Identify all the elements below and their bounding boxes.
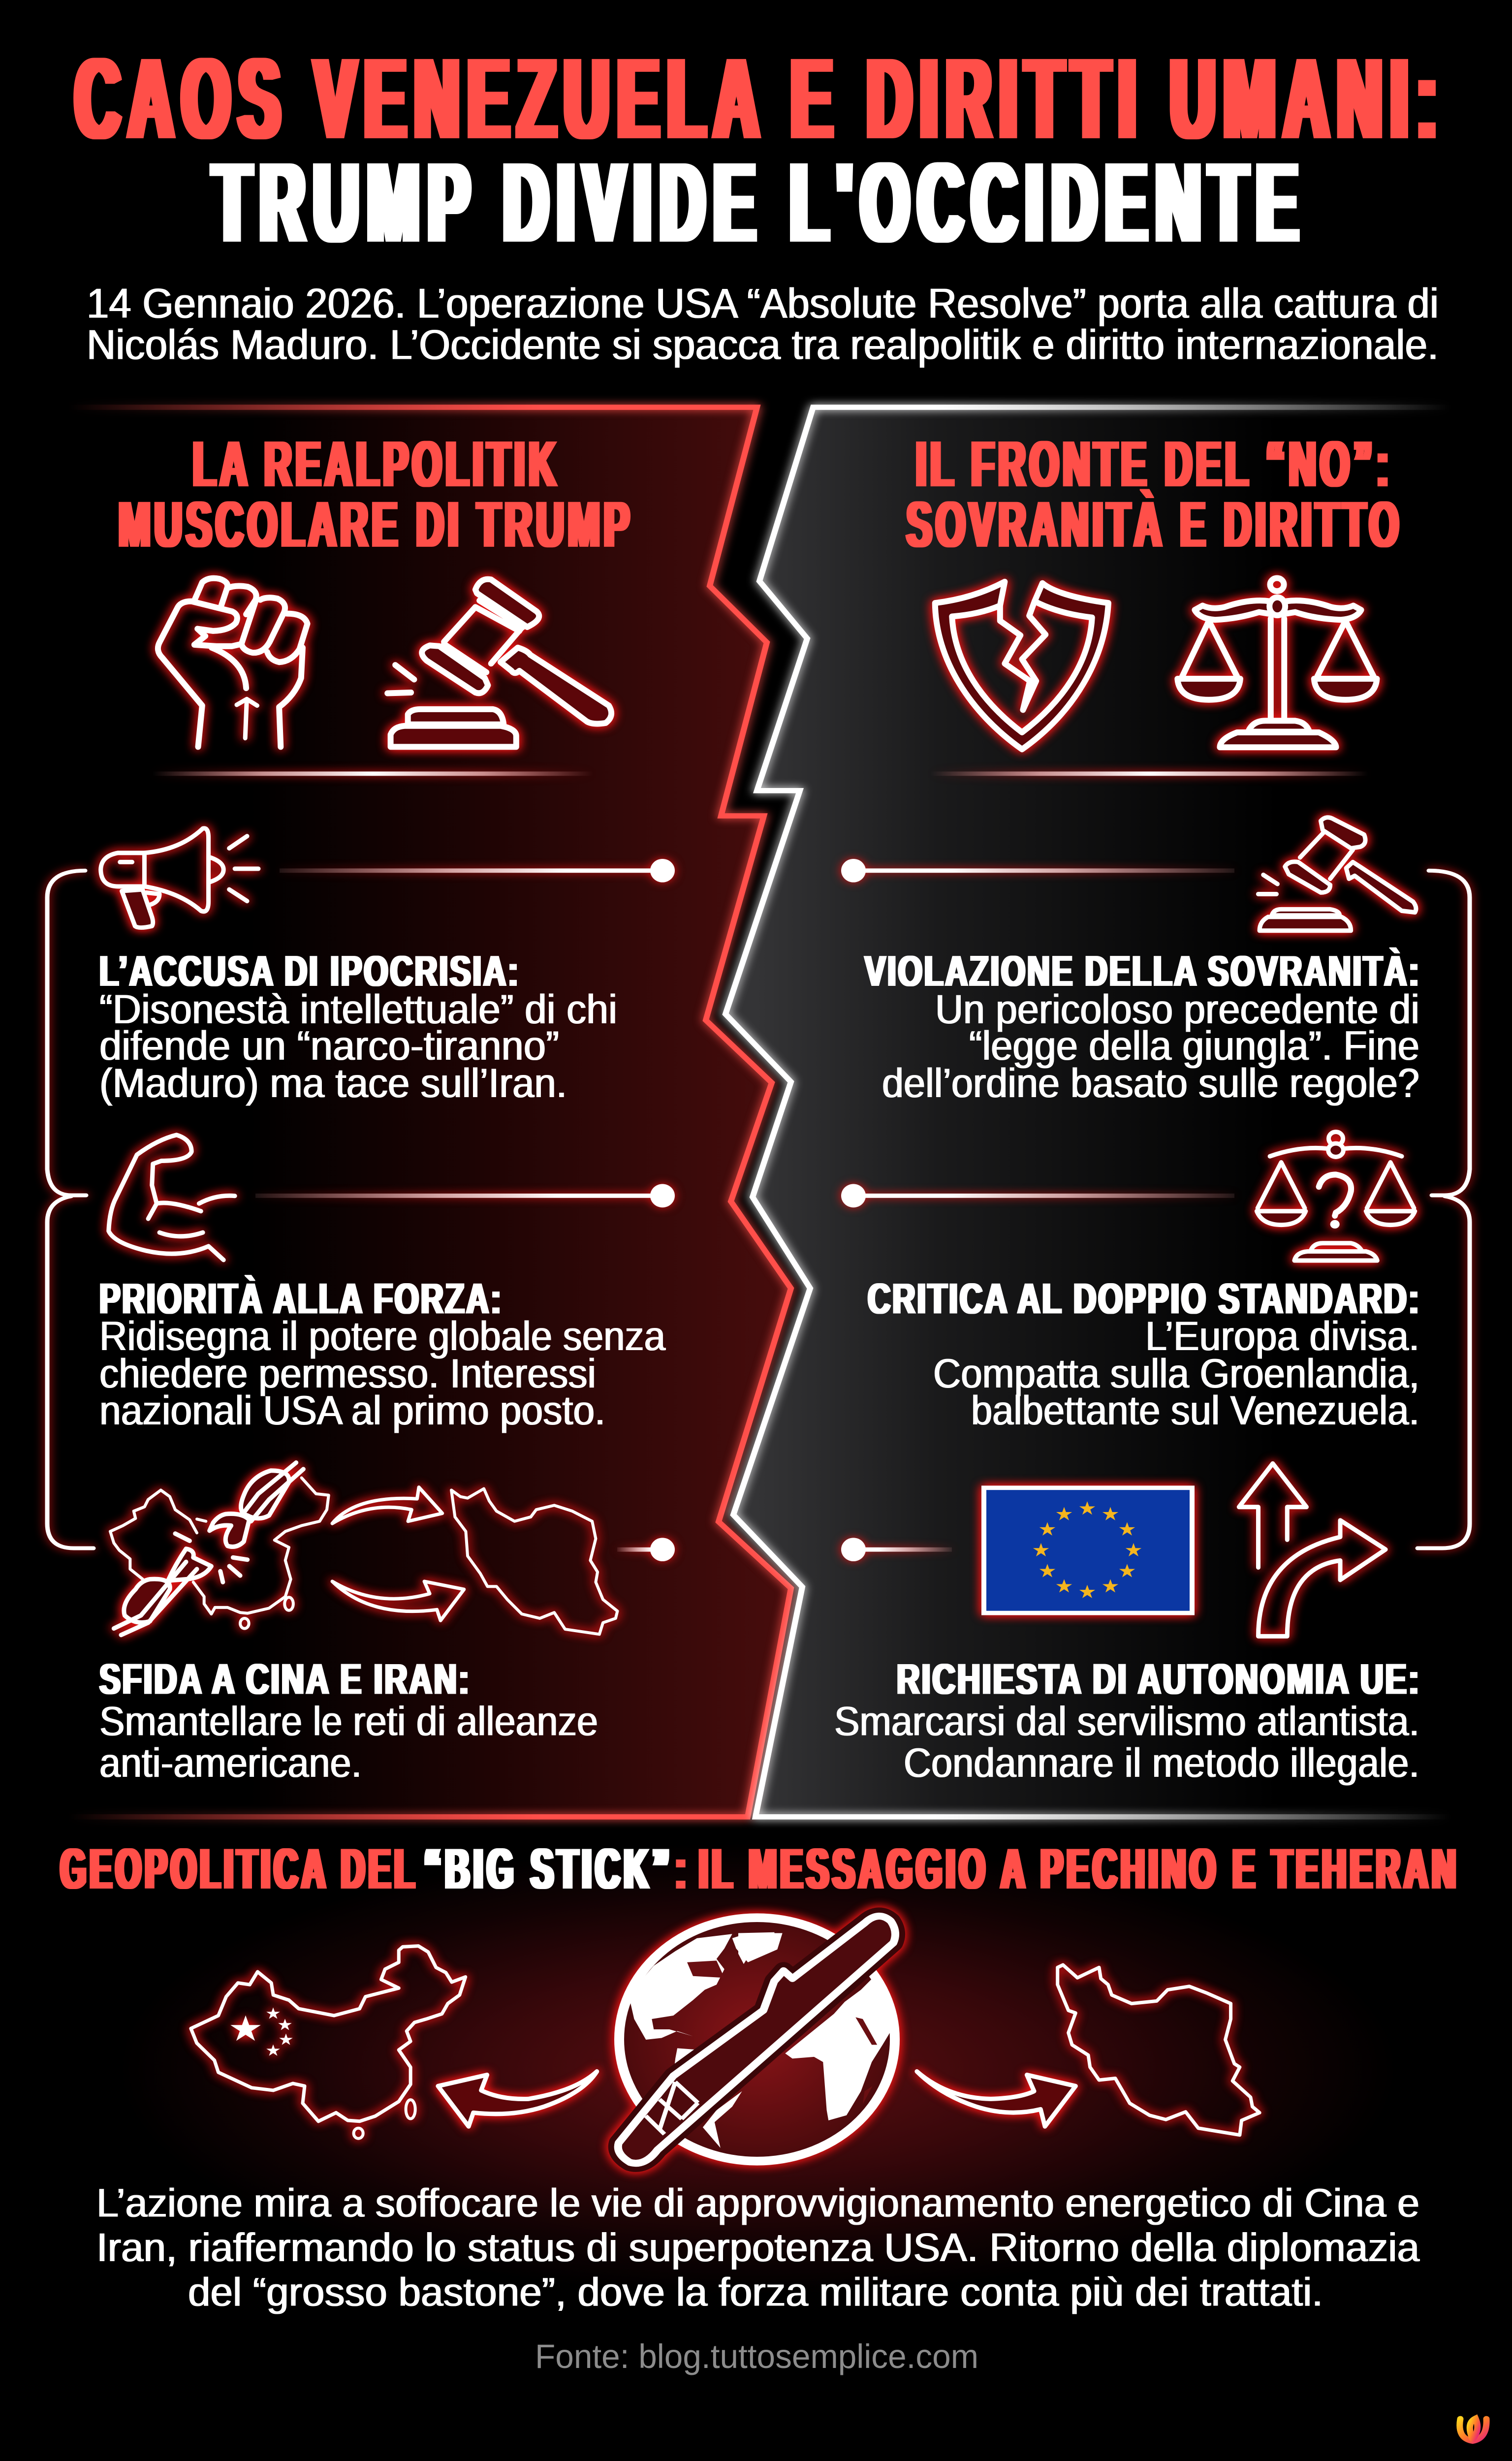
- icon: EU flag: [984, 1488, 1192, 1613]
- bottom paragraph: del “grosso bastone”, dove la forza militare conta più dei trattati.: [188, 2270, 1323, 2315]
- right panel heading: [907, 427, 1403, 561]
- arrow to china: [438, 2072, 597, 2126]
- text block: priorita alla forza: PRIORITÀ ALLA FORZA:: [99, 1274, 503, 1323]
- text block: sfida a cina e iran: Smantellare le reti di alleanze: [99, 1698, 598, 1744]
- icon: small gavel: [1258, 818, 1416, 931]
- text block: accusa di ipocrisia: [99, 947, 617, 1106]
- connector lines right: [841, 859, 1234, 1561]
- icon: broken shield: [935, 582, 1108, 749]
- text block: accusa di ipocrisia: L’ACCUSA DI IPOCRISIA:: [99, 947, 520, 995]
- text block: priorita alla forza: nazionali USA al primo posto.: [99, 1387, 605, 1433]
- text block: critica al doppio standard: L’Europa divisa.: [1145, 1313, 1419, 1359]
- globe fill: [619, 1918, 895, 2161]
- icon: raised fist: [158, 578, 308, 747]
- right bracket: [1418, 871, 1470, 1548]
- icon: megaphone: [101, 828, 258, 928]
- icon: china outline with flag stars: [191, 1946, 466, 2139]
- bottom section glow: [118, 1843, 1398, 2295]
- bottom heading: :: [675, 1837, 686, 1901]
- text block: accusa di ipocrisia: difende un “narco-tiranno”: [99, 1022, 559, 1069]
- source: Fonte: blog.tuttosemplice.com: [535, 2337, 978, 2375]
- panel: right background: [725, 407, 1447, 1817]
- left zigzag border: [67, 407, 791, 1817]
- bat cut-out: [618, 1916, 895, 2163]
- text block: sfida a cina e iran: anti-americane.: [99, 1739, 362, 1786]
- bottom heading: GEOPOLITICA DEL: [61, 1837, 418, 1901]
- left bracket: [47, 871, 94, 1548]
- icon: scales of justice: [1177, 578, 1377, 747]
- text block: richiesta di autonomia ue: [834, 1655, 1421, 1786]
- text block: sfida a cina e iran: [99, 1655, 598, 1786]
- right zigzag border: [725, 407, 1452, 1817]
- left panel heading: [119, 427, 633, 561]
- panel: left background: [67, 407, 791, 1817]
- intro text: [87, 280, 1439, 368]
- logo: [1460, 2418, 1486, 2441]
- upper chain: [241, 1471, 289, 1518]
- text block: priorita alla forza: [99, 1274, 665, 1433]
- icon: gavel: [387, 579, 611, 747]
- bottom paragraph: [96, 2181, 1420, 2315]
- text block: violazione della sovranita: Un pericoloso precedente di: [935, 986, 1419, 1032]
- divider left: [152, 771, 593, 776]
- left panel heading: LA REALPOLITIK: [193, 427, 560, 500]
- bottom heading: “BIG STICK”: [424, 1837, 673, 1901]
- icon: globe with big stick: [618, 1916, 895, 2163]
- lower chain: [124, 1579, 170, 1623]
- bottom heading: [61, 1837, 1460, 1901]
- icon: iran outline: [451, 1489, 617, 1634]
- icon: diverging arrows: [1239, 1463, 1386, 1636]
- title: [75, 34, 1446, 266]
- text block: critica al doppio standard: Compatta sulla Groenlandia,: [933, 1350, 1419, 1396]
- left panel heading: MUSCOLARE DI TRUMP: [119, 488, 633, 561]
- arrow to iran: [917, 2072, 1075, 2126]
- text block: critica al doppio standard: [868, 1274, 1421, 1433]
- chain sparks: [175, 1534, 248, 1582]
- text block: sfida a cina e iran: SFIDA A CINA E IRAN:: [99, 1655, 471, 1703]
- text block: violazione della sovranita: “legge della giungla”. Fine: [969, 1022, 1419, 1069]
- icon: china with broken chain: [110, 1463, 329, 1635]
- globe continents west: [630, 1933, 783, 2148]
- text block: violazione della sovranita: dell’ordine basato sulle regole?: [882, 1060, 1419, 1106]
- text block: violazione della sovranita: [865, 947, 1421, 1106]
- icon: scales with question mark: [1257, 1132, 1415, 1261]
- text block: accusa di ipocrisia: “Disonestà intellettuale” di chi: [99, 986, 617, 1032]
- text block: accusa di ipocrisia: (Maduro) ma tace sull’Iran.: [99, 1060, 567, 1106]
- text block: priorita alla forza: Ridisegna il potere globale senza: [99, 1313, 665, 1359]
- globe ring: [619, 1918, 895, 2161]
- divider right: [930, 771, 1368, 776]
- text block: critica al doppio standard: balbettante sul Venezuela.: [971, 1387, 1419, 1433]
- text block: priorita alla forza: chiedere permesso. Interessi: [99, 1350, 596, 1396]
- icon: iran outline bottom: [1058, 1965, 1260, 2135]
- connector lines left: [255, 859, 675, 1561]
- icon: arrows toward iran: [332, 1487, 464, 1620]
- globe continents east: [738, 1932, 893, 2120]
- icon: flexed arm: [109, 1135, 235, 1260]
- bat grip: [646, 2082, 698, 2134]
- bat: [618, 1916, 895, 2163]
